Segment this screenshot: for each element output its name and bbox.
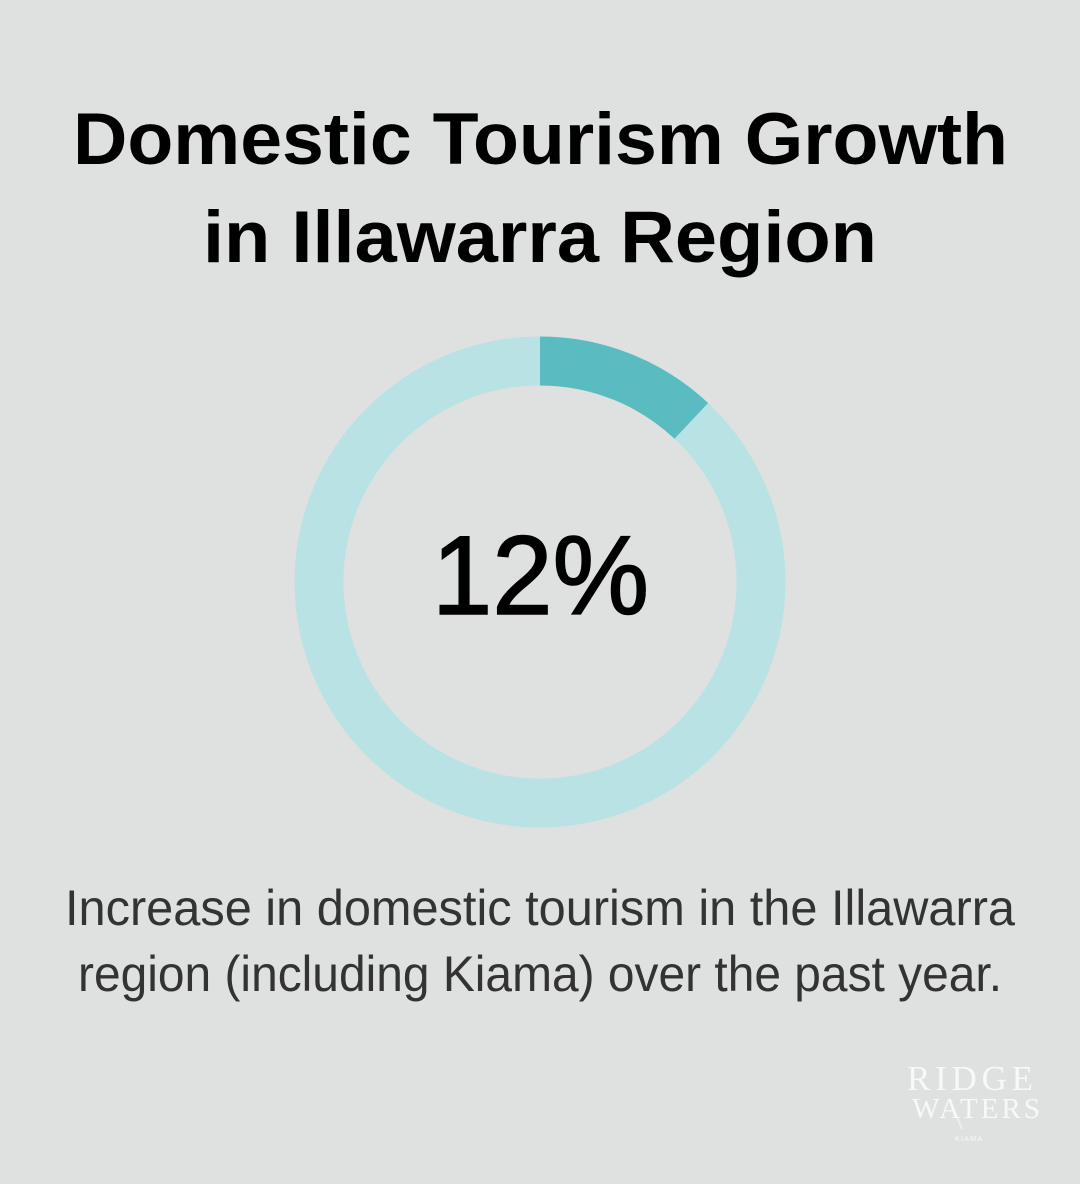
logo: Ridge Waters Kiama: WATERS — [912, 1093, 1040, 1125]
logo: Ridge Waters Kiama: KIAMA — [955, 1136, 982, 1143]
description: region (including Kiama) over the past year. — [78, 946, 1002, 1002]
title: Domestic Tourism Growth — [73, 99, 1008, 180]
description: Increase in domestic tourism in the Illawarra — [65, 880, 1015, 936]
logo: Ridge Waters Kiama — [907, 1059, 1040, 1143]
title: in Illawarra Region — [203, 197, 877, 278]
title — [73, 99, 1008, 278]
value: 12%: 12% — [432, 513, 649, 638]
logo: Ridge Waters Kiama: RIDGE — [907, 1059, 1033, 1098]
description — [65, 880, 1015, 1002]
donut chart — [319, 361, 761, 803]
